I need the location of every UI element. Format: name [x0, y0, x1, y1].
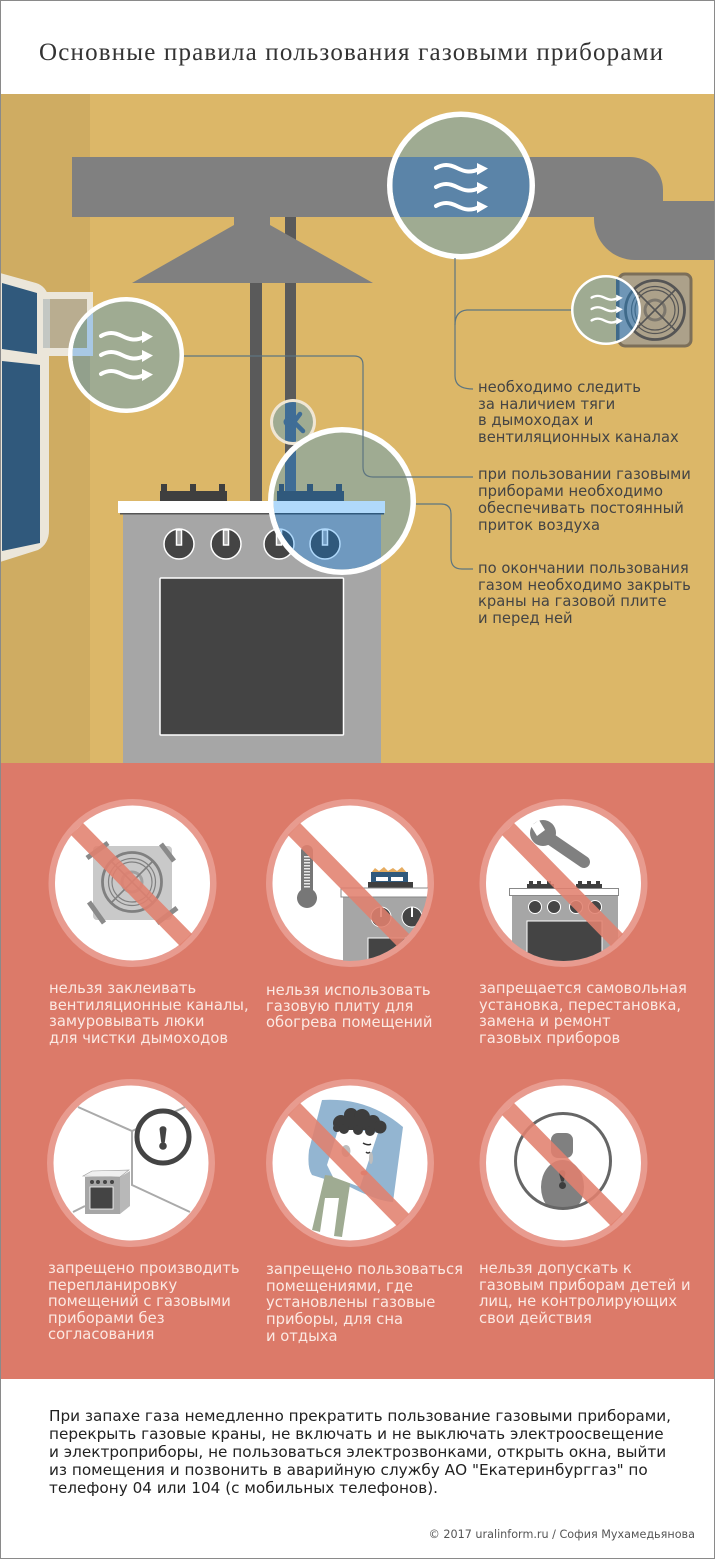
- duct: [72, 157, 715, 260]
- text: children: нельзя допускать к: [479, 1260, 632, 1277]
- icon: self-repair prohibited: [480, 799, 648, 971]
- window: [0, 273, 93, 562]
- text: installation: установка, перестановка,: [479, 997, 681, 1014]
- callout: draught: вентиляционных каналах: [478, 429, 679, 446]
- text: replanning: помещений с газовыми: [48, 1293, 231, 1310]
- callout: close taps: и перед ней: [478, 610, 573, 627]
- callout: draught: в дымоходах и: [478, 412, 593, 429]
- text: replanning: согласования: [48, 1326, 154, 1343]
- text: vents: вентиляционные каналы,: [49, 997, 249, 1014]
- stove: [118, 484, 385, 763]
- connector lines: [184, 258, 571, 569]
- text: sleeping: приборы, для сна: [266, 1311, 403, 1328]
- callout: air supply: при пользовании газовыми: [478, 466, 691, 483]
- lens: gas tap on pipe: [270, 399, 316, 445]
- gas smell instructions: из помещения и позвонить в аварийную службу АО "Екатеринбурггаз" по: [49, 1461, 648, 1479]
- lens: duct airflow: [385, 110, 540, 260]
- panel: prohibitions: [0, 763, 715, 1379]
- icon: replanning prohibited: [47, 1079, 215, 1247]
- callout: air supply: обеспечивать постоянный: [478, 500, 684, 517]
- gas smell instructions: перекрыть газовые краны, не включать и не выключать электроосвещение: [49, 1425, 664, 1443]
- lens: window airflow: [68, 297, 184, 413]
- text: sleeping: запрещено пользоваться: [266, 1261, 463, 1278]
- callout: draught: за наличием тяги: [478, 396, 615, 413]
- header panel: [0, 0, 715, 94]
- text: children: свои действия: [479, 1310, 592, 1327]
- callout: draught: необходимо следить: [478, 379, 641, 396]
- icon: taped vent prohibited: [48, 799, 216, 967]
- text: sleeping: установлены газовые: [266, 1294, 435, 1311]
- icon: sleeping prohibited: [266, 1079, 434, 1247]
- gas smell instructions: При запахе газа немедленно прекратить пользование газовыми приборами,: [49, 1407, 671, 1425]
- fan vent: [619, 274, 691, 346]
- gas smell instructions: и электроприборы, не пользоваться электрозвонками, открыть окна, выйти: [49, 1443, 666, 1461]
- callout: close taps: по окончании пользования: [478, 560, 689, 577]
- text: sleeping: помещениями, где: [266, 1278, 413, 1295]
- text: children: лиц, не контролирующих: [479, 1293, 677, 1310]
- text: replanning: перепланировку: [48, 1277, 177, 1294]
- copyright: © 2017 uralinform.ru / София Мухамедьянова: [429, 1528, 695, 1541]
- callout: air supply: приток воздуха: [478, 517, 600, 534]
- pipes: [250, 217, 296, 507]
- gas smell instructions: телефону 04 или 104 (с мобильных телефонов).: [49, 1479, 438, 1497]
- icon: children prohibited: [480, 1079, 648, 1247]
- lens: stove controls: [264, 427, 416, 575]
- panel: kitchen scene: [0, 94, 715, 763]
- text: installation: замена и ремонт: [479, 1013, 611, 1030]
- text: heating: обогрева помещений: [266, 1014, 432, 1031]
- text: replanning: приборами без: [48, 1310, 165, 1327]
- text: heating: газовую плиту для: [266, 998, 413, 1015]
- text: vents: замуровывать люки: [49, 1013, 205, 1030]
- text: installation: газовых приборов: [479, 1030, 620, 1047]
- text: sleeping: и отдыха: [266, 1328, 338, 1345]
- lens: fan airflow: [571, 275, 641, 345]
- text: vents: для чистки дымоходов: [49, 1030, 228, 1047]
- footer panel: [0, 1379, 715, 1559]
- text: children: газовым приборам детей и: [479, 1277, 691, 1294]
- range hood: [132, 217, 373, 283]
- title: Основные правила пользования газовыми приборами: [39, 39, 663, 66]
- callout: close taps: газом необходимо закрыть: [478, 577, 691, 594]
- text: heating: нельзя использовать: [266, 982, 431, 999]
- callout: close taps: краны на газовой плите: [478, 593, 667, 610]
- callout: air supply: приборами необходимо: [478, 483, 663, 500]
- text: vents: нельзя заклеивать: [49, 980, 196, 997]
- icon: heating with stove prohibited: [266, 799, 441, 970]
- text: replanning: запрещено производить: [48, 1260, 240, 1277]
- text: installation: запрещается самовольная: [479, 980, 687, 997]
